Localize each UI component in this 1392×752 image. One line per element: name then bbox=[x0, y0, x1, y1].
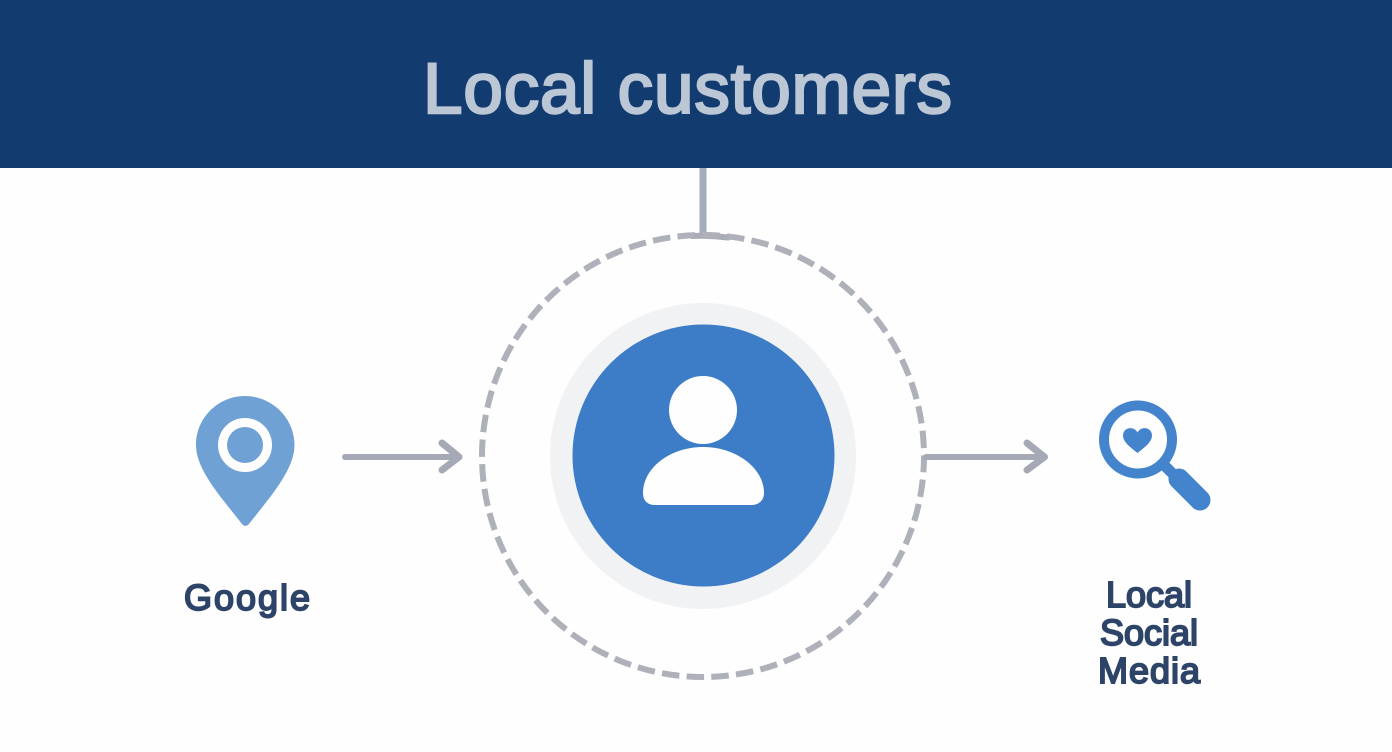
arrow: Google to customer bbox=[345, 443, 459, 470]
label: Local Social Media: Media bbox=[1098, 650, 1201, 691]
label: Google: Google bbox=[184, 577, 310, 618]
header banner bbox=[0, 0, 1392, 168]
dashed circle ring bbox=[482, 235, 924, 677]
label: Local Social Media bbox=[1098, 574, 1201, 691]
central customer icon bbox=[550, 303, 856, 609]
connector line from header to circle bbox=[692, 168, 728, 238]
title: Local customers bbox=[423, 50, 952, 129]
label: Local Social Media: Local bbox=[1106, 574, 1192, 615]
arrow: customer to social media bbox=[926, 443, 1044, 470]
icon: map pin bbox=[196, 396, 294, 526]
label: Local Social Media: Social bbox=[1100, 612, 1198, 653]
icon: magnifier with heart bbox=[1104, 406, 1200, 500]
